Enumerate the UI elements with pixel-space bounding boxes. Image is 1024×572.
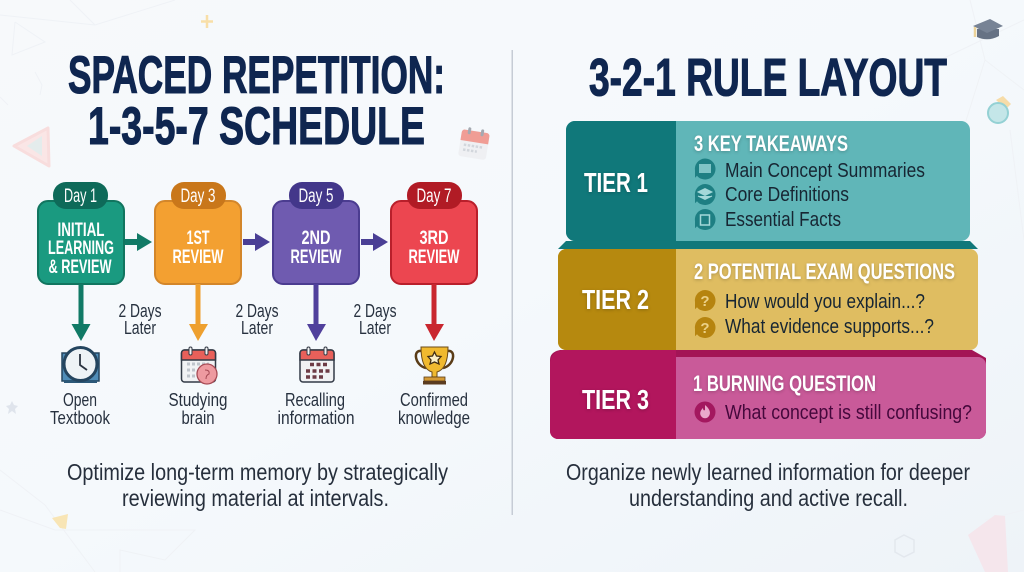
label: 2 days later	[354, 301, 396, 338]
tier 3: TIER 3	[582, 384, 649, 415]
step: day 7 card: 3RD	[420, 227, 448, 249]
label: recalling information: Recalling	[285, 390, 345, 410]
decoration: faint star	[6, 401, 18, 414]
icon: calendar with brain	[182, 347, 217, 384]
label: confirmed knowledge: knowledge	[398, 408, 470, 428]
step: day 1 card: & REVIEW	[48, 256, 112, 278]
caption: spaced repetition: reviewing material at intervals.	[122, 485, 389, 511]
arrow: day 5 down	[307, 284, 326, 341]
icon: question bubble: ?	[700, 320, 710, 337]
title: spaced repetition	[68, 46, 445, 156]
panel: 3-2-1 pyramid	[550, 121, 986, 439]
tier 1: Main Concept Summaries	[725, 160, 925, 182]
step: day 3 card	[155, 182, 241, 284]
icon: flame	[694, 402, 716, 422]
label: 2 days later: Later	[124, 318, 156, 338]
step: day 5 card: 2ND	[302, 227, 330, 249]
tier 3	[550, 350, 986, 439]
icon: question bubble	[695, 290, 716, 311]
decoration: red corner shape	[968, 515, 1008, 572]
step: day 7 card	[391, 182, 477, 284]
decoration: plus sign	[201, 15, 213, 28]
label: 2 days later: Later	[359, 318, 391, 338]
label: 2 days later: 2 Days	[236, 301, 278, 321]
arrow: day 1 to day 3	[125, 233, 152, 251]
tier 3: What concept is still confusing?	[725, 402, 972, 424]
tier 1: Core Definitions	[725, 184, 849, 206]
icon: checklist bubble	[695, 209, 716, 230]
arrow: day 7 down	[425, 284, 444, 341]
decoration: yellow shard	[52, 514, 68, 529]
label: 2 days later: Later	[241, 318, 273, 338]
step: day 1 card	[38, 182, 124, 284]
tier 2: How would you explain...?	[725, 291, 925, 313]
label: open textbook: Open	[63, 390, 97, 410]
label: confirmed knowledge: Confirmed	[400, 390, 468, 410]
title: spaced repetition: 1-3-5-7 SCHEDULE	[88, 97, 425, 156]
decoration: gem	[988, 96, 1011, 123]
label: studying brain	[168, 390, 228, 428]
step: day 5 card	[273, 182, 359, 284]
caption: spaced repetition: Optimize long-term memory by strategically	[67, 459, 448, 485]
icon: book bubble	[695, 158, 716, 180]
label: 2 days later	[118, 301, 162, 338]
caption: spaced repetition	[67, 459, 448, 511]
caption: 3-2-1 rule	[566, 459, 970, 511]
tier 2: What evidence supports...?	[725, 316, 934, 338]
tier 2: TIER 2	[582, 284, 649, 315]
tier 3: 1 BURNING QUESTION	[693, 371, 876, 396]
decoration: graduation cap	[973, 19, 1003, 39]
icon: question bubble: ?	[700, 293, 710, 310]
step: day 5 card: Day 5	[298, 186, 334, 207]
label: recalling information: information	[278, 408, 354, 428]
arrow: day 1 down	[72, 284, 90, 341]
tier 1	[566, 121, 970, 241]
tier 2	[558, 241, 978, 350]
label: confirmed knowledge	[398, 390, 470, 428]
step: day 7 card: Day 7	[416, 186, 452, 207]
label: 2 days later: 2 Days	[354, 301, 396, 321]
label: open textbook: Textbook	[50, 408, 111, 428]
step: day 1 card: LEARNING	[48, 237, 114, 259]
icon: trophy	[416, 347, 453, 384]
step: day 3 card: 1ST	[186, 227, 210, 249]
icon: open textbook with clock	[62, 348, 99, 383]
icon: calendar	[300, 347, 334, 382]
label: studying brain: Studying	[168, 390, 228, 410]
tier 1: TIER 1	[584, 167, 648, 198]
step: day 5 card: REVIEW	[290, 246, 342, 268]
step: day 1 card: Day 1	[64, 186, 97, 207]
step: day 7 card: REVIEW	[408, 246, 460, 268]
tier 1: 3 KEY TAKEAWAYS	[694, 131, 848, 156]
step: day 3 card: Day 3	[180, 186, 216, 207]
label: 2 days later	[236, 301, 278, 338]
decoration: faint hexagon	[895, 535, 914, 557]
caption: 3-2-1 rule: understanding and active recall.	[629, 485, 908, 511]
decoration: calendar	[458, 126, 490, 160]
decoration: faded triangle	[14, 128, 49, 166]
title: spaced repetition: SPACED REPETITION:	[68, 46, 445, 105]
label: recalling information	[278, 390, 354, 428]
icon: layers bubble	[695, 184, 716, 205]
arrow: day 3 to day 5	[243, 233, 270, 251]
step: day 1 card: INITIAL	[58, 219, 105, 241]
tier 1: Essential Facts	[725, 209, 841, 231]
label: studying brain: brain	[182, 408, 214, 428]
step: day 3 card: REVIEW	[172, 246, 224, 268]
panel: 1-3-5-7 schedule flow	[38, 182, 477, 428]
label: 2 days later: 2 Days	[118, 301, 162, 321]
arrow: day 3 down	[189, 284, 208, 341]
icon: question bubble	[695, 317, 716, 338]
label: open textbook	[50, 390, 111, 428]
arrow: day 5 to day 7	[361, 233, 388, 251]
